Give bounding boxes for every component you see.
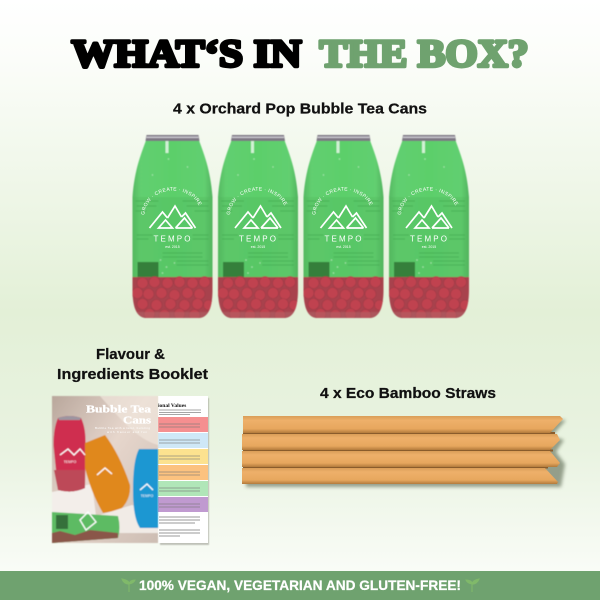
booklet cover: TEMPO: [64, 460, 76, 464]
title: WHAT‘S IN: [72, 32, 302, 76]
can 2: [217, 134, 299, 319]
can 3: est. 2015: [336, 245, 351, 249]
can 1: [132, 134, 214, 319]
cover title: with flavour and fun: [107, 430, 147, 434]
can 1: GROW · CREATE · INSPIRE: [141, 187, 202, 214]
booklet cover: [52, 396, 158, 543]
can 2: TEMPO: [239, 235, 276, 244]
cover title: [86, 404, 152, 434]
heading: booklet: Flavour &: [96, 346, 165, 363]
can 4: [388, 134, 470, 319]
cover title: Cans: [123, 414, 152, 426]
red can: [54, 416, 86, 492]
heading: cans: 4 x Orchard Pop Bubble Tea Cans: [173, 100, 427, 118]
can 1: TEMPO: [154, 235, 190, 244]
straw 1: [243, 416, 563, 433]
straw 2: [242, 434, 560, 450]
blue can: [133, 449, 158, 528]
title: THE BOX?: [320, 32, 528, 76]
heading: straws: 4 x Eco Bamboo Straws: [320, 385, 496, 402]
can 3: GROW · CREATE · INSPIRE: [312, 187, 373, 214]
straw 4: [242, 468, 558, 484]
can 1: est. 2015: [165, 245, 180, 249]
heading: booklet: Ingredients Booklet: [57, 366, 208, 383]
can 3: [302, 134, 384, 319]
orange can: [85, 435, 130, 513]
booklet cover: TEMPO: [141, 494, 153, 498]
booklet back page: [158, 396, 209, 545]
white pedestal: [100, 505, 158, 533]
heading: booklet: [57, 346, 208, 383]
bamboo straws: [242, 416, 566, 487]
banner text: 100% VEGAN, VEGETARIAN AND GLUTEN-FREE!: [139, 577, 461, 593]
can 4: TEMPO: [410, 235, 447, 244]
can 2: GROW · CREATE · INSPIRE: [226, 187, 288, 214]
green can: [52, 512, 120, 543]
can 2: est. 2015: [251, 245, 265, 249]
cover title: Bubble Tea: [86, 404, 152, 416]
can 3: TEMPO: [324, 235, 362, 244]
booklet: [52, 396, 209, 545]
title: [72, 32, 528, 76]
cover logos: [60, 449, 85, 455]
booklet back page: ional Values: [158, 403, 186, 409]
can 4: est. 2015: [422, 245, 436, 249]
can 4: GROW · CREATE · INSPIRE: [398, 187, 458, 214]
icon: right sprout: [466, 579, 479, 592]
can row: [132, 134, 470, 319]
footer banner: [0, 571, 600, 600]
icon: left sprout: [122, 579, 135, 592]
straw 3: [242, 451, 560, 467]
cover title: Bubble Tea with a twist, bursting: [95, 426, 150, 430]
